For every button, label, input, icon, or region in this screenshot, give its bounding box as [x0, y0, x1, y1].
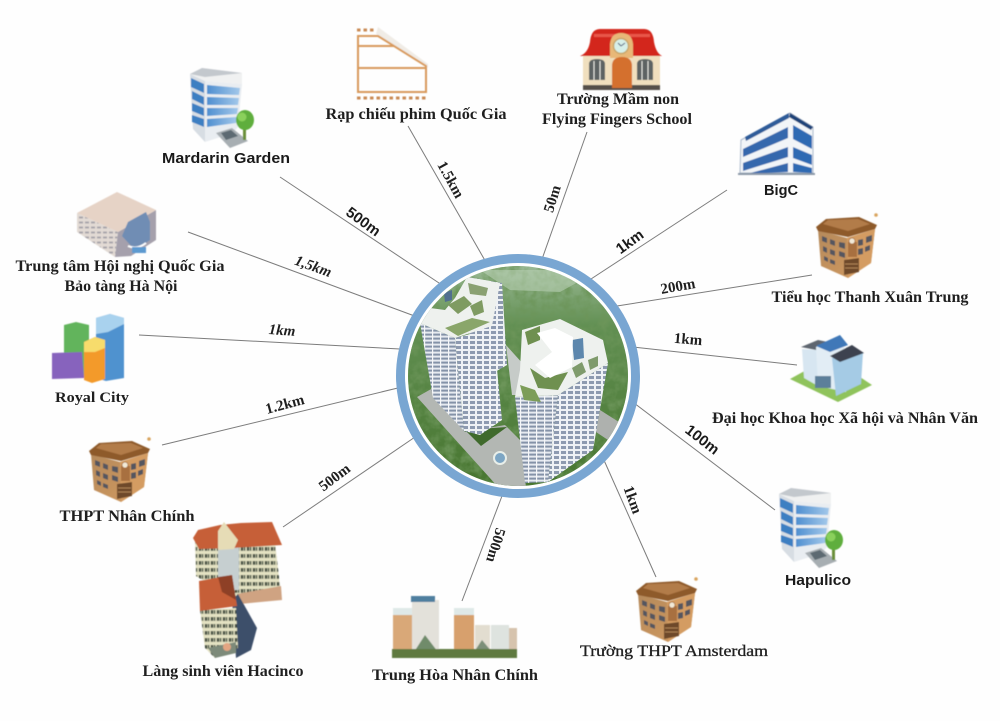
location: Làng sinh viên Hacinco: [142, 435, 418, 680]
icon: university campus: [790, 335, 872, 402]
aerial view of twin towers: [405, 263, 631, 489]
distance label: 1km: [268, 322, 296, 340]
connector line: [634, 403, 775, 510]
place name: Làng sinh viên Hacinco: [142, 663, 304, 680]
icon: apartment skyline: [392, 596, 517, 658]
connector line: [541, 132, 587, 262]
location: THPT Nhân Chính: [60, 387, 402, 525]
blue ring frame: [400, 258, 636, 494]
icon: student housing: [193, 522, 282, 658]
location: Trung tâm Hội nghị Quốc Gia: [16, 192, 420, 318]
location: BigC: [591, 113, 815, 279]
icon: school: [636, 577, 698, 642]
connector line: [188, 232, 420, 318]
connector line: [617, 275, 812, 306]
connector line: [280, 177, 442, 285]
icon: school: [816, 213, 878, 278]
distance label: 1km: [673, 331, 703, 349]
place name: Royal City: [55, 390, 130, 406]
plaza and road: [417, 388, 526, 487]
connector line: [603, 458, 656, 577]
icon: blue supermarket building: [738, 113, 815, 175]
connector line: [283, 435, 418, 527]
distance label: 1km: [620, 484, 645, 517]
connector line: [139, 335, 400, 349]
place name: THPT Nhân Chính: [60, 508, 195, 525]
place name: Trung Hòa Nhân Chính: [372, 667, 538, 684]
icon: colourful towers: [52, 314, 124, 383]
place name: Đại học Khoa học Xã hội và Nhân Văn: [712, 410, 978, 427]
icon: kindergarten: [580, 29, 662, 90]
place name second line: Bảo tàng Hà Nội: [64, 278, 178, 295]
place name: Mardarin Garden: [162, 151, 290, 167]
distance label: 1.5km: [433, 159, 467, 202]
place name: Trung tâm Hội nghị Quốc Gia: [16, 258, 225, 275]
location: Tiểu học Thanh Xuân Trung: [617, 213, 969, 306]
right tower: [515, 319, 608, 483]
place name: BigC: [764, 183, 799, 199]
distance label: 1,5km: [292, 253, 334, 281]
location: Trường Mầm non Flying Fingers School: [541, 29, 693, 262]
location: Rạp chiếu phim Quốc Gia: [326, 27, 507, 264]
location: Mardarin Garden: [162, 68, 442, 285]
connector line: [591, 190, 727, 279]
left tower: [420, 277, 507, 435]
connector line: [408, 126, 487, 264]
icon: school: [89, 437, 151, 502]
place name: Tiểu học Thanh Xuân Trung: [772, 289, 969, 306]
connector line: [462, 496, 502, 601]
distance label: 50m: [541, 183, 565, 214]
place name: Trường THPT Amsterdam: [580, 643, 768, 660]
connector line: [633, 347, 797, 365]
central project image: [400, 258, 636, 494]
icon: office building: [779, 488, 843, 568]
distance label: 500m: [342, 204, 384, 240]
place name second line: Flying Fingers School: [542, 111, 693, 128]
distance label: 1km: [613, 226, 647, 258]
icon: conference centre: [77, 192, 156, 257]
distance label: 500m: [482, 526, 508, 565]
location: Trường THPT Amsterdam: [580, 458, 768, 660]
place name: Rạp chiếu phim Quốc Gia: [326, 106, 507, 123]
icon: office building: [190, 68, 254, 148]
distance label: 500m: [316, 461, 354, 495]
distance label: 1.2km: [264, 392, 307, 418]
distance label: 100m: [682, 421, 722, 459]
place name: Trường Mầm non: [557, 91, 679, 108]
distance label: 200m: [659, 276, 697, 298]
location: Hapulico: [634, 403, 851, 589]
location: Trung Hòa Nhân Chính: [372, 496, 538, 684]
place name: Hapulico: [785, 573, 851, 589]
location: Royal City: [52, 314, 400, 406]
icon: film strip: [357, 27, 428, 98]
connector line: [162, 387, 402, 445]
location: Đại học Khoa học Xã hội và Nhân Văn: [633, 331, 978, 427]
